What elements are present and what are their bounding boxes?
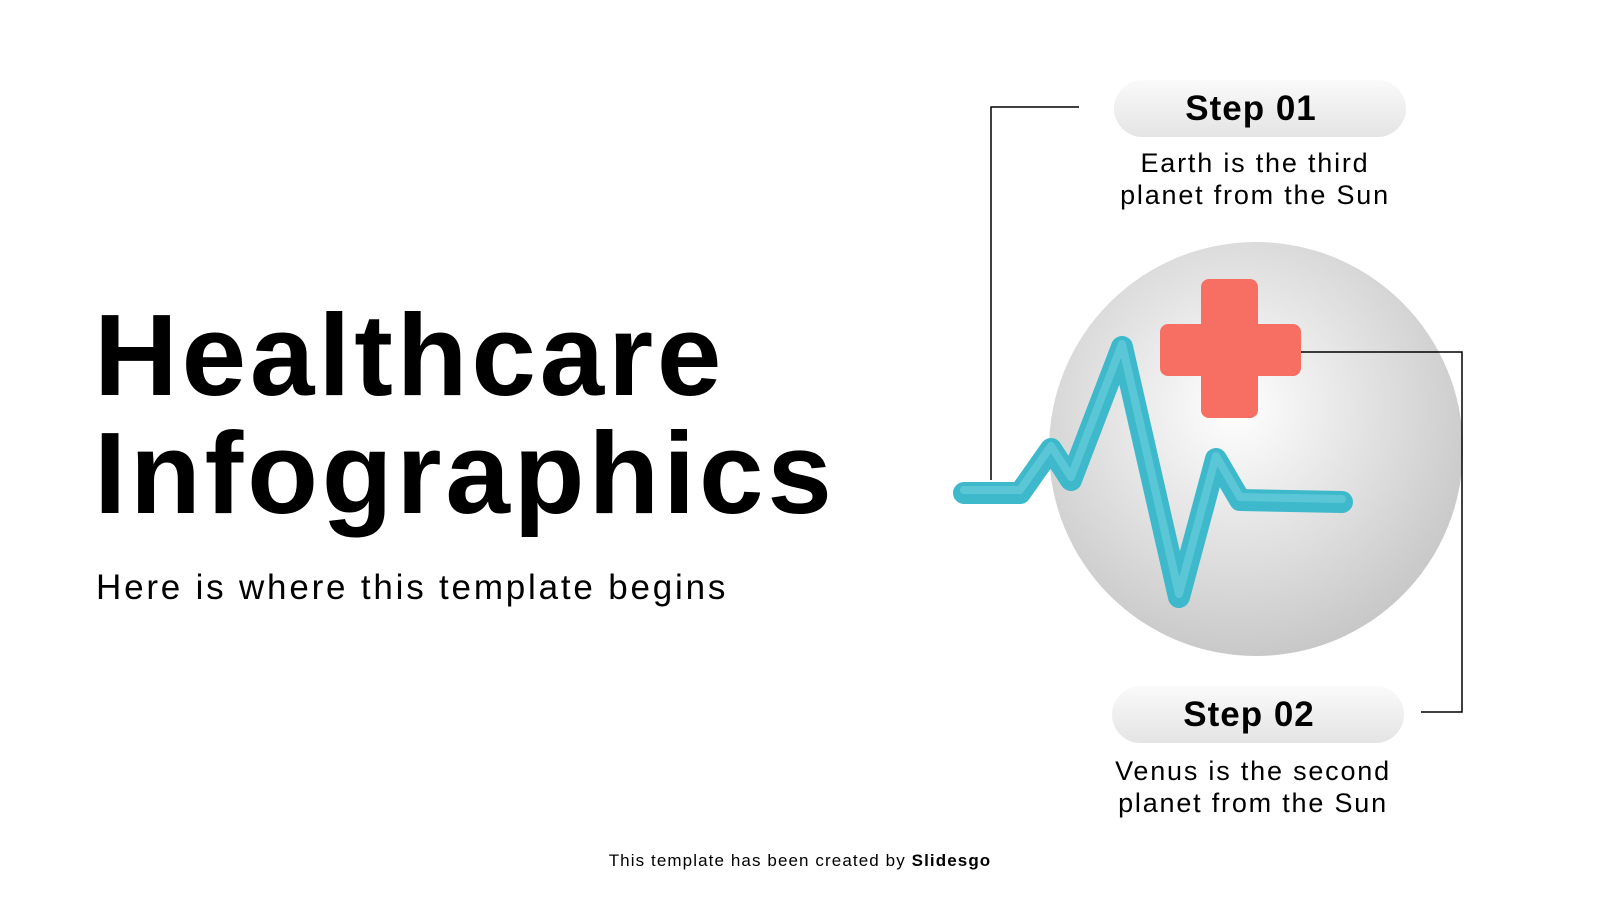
subtitle: Here is where this template begins: [96, 568, 728, 607]
step 02 pill: Step 02: [1183, 695, 1315, 734]
step 02 pill: [1112, 686, 1404, 743]
step 02 description: Venus is the second: [1115, 756, 1391, 786]
step 02 description: [1115, 756, 1391, 818]
title: Healthcare: [94, 290, 725, 420]
title: Infographics: [94, 408, 836, 538]
step 02 description: planet from the Sun: [1118, 788, 1388, 818]
step 01 pill: Step 01: [1185, 89, 1317, 128]
step 01 description: planet from the Sun: [1120, 180, 1390, 210]
step 01 description: Earth is the third: [1140, 148, 1370, 178]
step 01 pill: [1114, 80, 1406, 137]
title: [94, 290, 836, 538]
step 01 description: [1120, 148, 1390, 210]
footer: This template has been created by Slidesgo: [609, 851, 991, 870]
